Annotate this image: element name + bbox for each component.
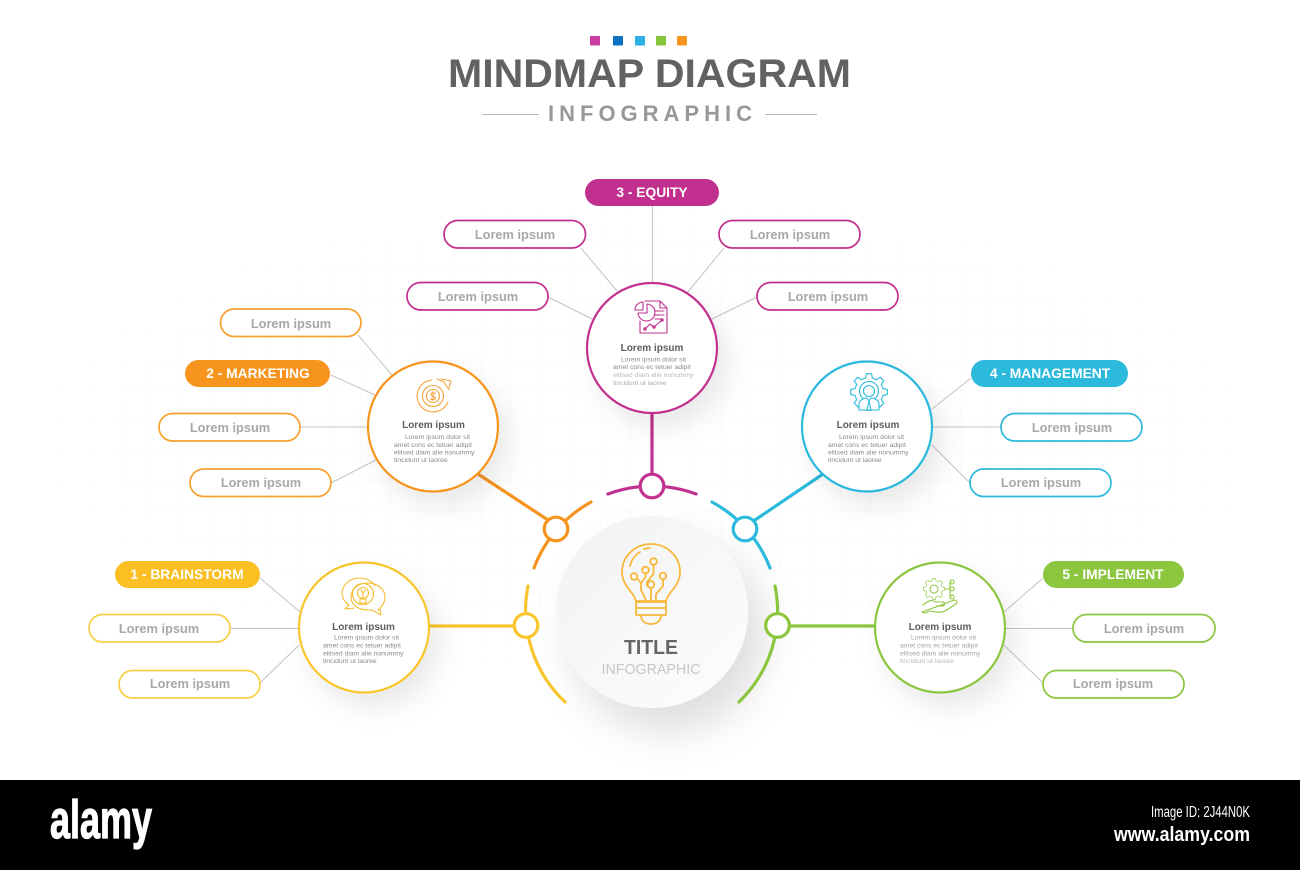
branch 4: management	[932, 360, 1142, 496]
center subtitle: INFOGRAPHIC	[602, 661, 701, 678]
text: implement node: tincidunt ut laoree	[900, 658, 954, 665]
pill: equity lower right	[757, 282, 898, 310]
text: implement node: amet cons ec tetuer adipit	[900, 642, 978, 650]
icon: speech bubbles with bulb	[342, 578, 385, 615]
branch 3: equity	[407, 179, 898, 319]
label: 1 - brainstorm: 1 - BRAINSTORM	[130, 567, 244, 582]
text: equity node: elitsed diam alie nonummy	[613, 372, 694, 379]
connector: green	[739, 586, 874, 702]
label: 4 - management: 4 - MANAGEMENT	[990, 366, 1111, 381]
label: 1 - brainstorm	[115, 561, 260, 588]
text: marketing node: tincidunt ut laoree	[394, 457, 448, 464]
text: marketing node: amet cons ec tetuer adipit	[394, 442, 472, 449]
label: 4 - management	[971, 360, 1128, 387]
pill: implement middle	[1073, 614, 1215, 642]
icon: dollar target	[417, 379, 451, 412]
text: equity node: tincidunt ut laoree	[613, 380, 667, 387]
title: MINDMAP DIAGRAM	[448, 52, 851, 96]
pill: marketing middle: Lorem ipsum	[190, 420, 270, 435]
center title: TITLE	[624, 637, 678, 659]
label: 3 - equity: 3 - EQUITY	[616, 185, 688, 200]
text: implement node: elitsed diam alie nonummy	[900, 650, 981, 658]
label: 5 - implement	[1043, 561, 1184, 588]
text: management node: tincidunt ut laoree	[828, 457, 882, 464]
logo: alamy: alamy	[50, 790, 152, 850]
text: management node	[828, 420, 909, 464]
pill: equity top left	[444, 220, 586, 248]
text: implement node: Lorem ipsum	[909, 622, 971, 633]
pill: marketing middle	[159, 414, 300, 441]
text: management node: amet cons ec tetuer adipit	[828, 442, 906, 449]
text: management node: Lorem ipsum dolor sit	[839, 434, 904, 441]
branch 1: brainstorm	[89, 561, 300, 698]
pill: equity lower left: Lorem ipsum	[438, 289, 518, 304]
icon: hand with gear	[922, 578, 957, 613]
pill: marketing top	[220, 309, 361, 336]
node: marketing	[368, 362, 498, 492]
connector: yellow	[429, 586, 565, 702]
pill: equity top right: Lorem ipsum	[750, 227, 830, 242]
text: marketing node: Lorem ipsum dolor sit	[405, 434, 470, 441]
image id: Image ID: 2J44N0K	[1151, 804, 1250, 821]
pill: marketing top: Lorem ipsum	[251, 316, 331, 331]
text: marketing node: Lorem ipsum	[402, 420, 465, 431]
text: implement node	[900, 622, 981, 665]
footer band	[0, 780, 1300, 870]
label: 2 - marketing	[185, 360, 330, 387]
text: equity node: amet cons ec tetuer adipit	[613, 364, 691, 371]
icon: report document	[635, 301, 667, 333]
text: implement node: Lorem ipsum dolor sit	[911, 634, 976, 642]
connector arcs and nodes	[429, 414, 874, 702]
branch 5: implement	[1004, 561, 1215, 698]
pill: equity lower left	[407, 282, 548, 310]
text: brainstorm node: Lorem ipsum dolor sit	[334, 634, 399, 642]
pill: brainstorm bottom	[119, 670, 260, 698]
node: equity	[587, 283, 717, 413]
label: 3 - equity	[585, 179, 719, 206]
pill: brainstorm middle	[89, 614, 230, 642]
text: brainstorm node: Lorem ipsum	[332, 622, 395, 633]
text: marketing node: elitsed diam alie nonummy	[394, 450, 475, 456]
label: 2 - marketing: 2 - MARKETING	[206, 366, 310, 381]
pill: equity top left: Lorem ipsum	[475, 227, 555, 242]
pill: management bottom: Lorem ipsum	[1001, 475, 1081, 490]
connector: orange	[478, 474, 591, 568]
text: marketing node	[394, 420, 475, 464]
connector: magenta	[608, 414, 696, 498]
icon: light bulb	[622, 544, 680, 624]
text: equity node: Lorem ipsum dolor sit	[621, 356, 686, 364]
text: equity node: Lorem ipsum	[621, 343, 683, 354]
text: brainstorm node: tincidunt ut laoree	[323, 658, 377, 665]
pill: brainstorm middle: Lorem ipsum	[119, 621, 199, 636]
text: brainstorm node	[323, 622, 404, 665]
text: brainstorm node: elitsed diam alie nonummy	[323, 650, 404, 658]
node: brainstorm	[299, 562, 429, 692]
color squares	[590, 36, 687, 46]
pill: implement middle: Lorem ipsum	[1104, 621, 1184, 636]
pill: management middle	[1001, 414, 1142, 441]
center circle	[556, 516, 748, 708]
text: brainstorm node: amet cons ec tetuer adipit	[323, 642, 401, 650]
branch 2: marketing	[159, 309, 392, 496]
pill: implement bottom	[1043, 670, 1184, 698]
label: 5 - implement: 5 - IMPLEMENT	[1062, 567, 1164, 582]
pill: marketing bottom	[190, 469, 331, 496]
pill: management middle: Lorem ipsum	[1032, 420, 1112, 435]
pill: equity lower right: Lorem ipsum	[788, 289, 868, 304]
text: equity node	[613, 343, 694, 387]
pill: equity top right	[719, 220, 860, 248]
text: management node: elitsed diam alie nonummy	[828, 450, 909, 456]
pill: implement bottom: Lorem ipsum	[1073, 676, 1153, 691]
text: management node: Lorem ipsum	[837, 420, 899, 431]
pill: management bottom	[970, 469, 1111, 496]
website: www.alamy.com	[1113, 824, 1250, 846]
connector: blue	[712, 474, 823, 568]
pill: marketing bottom: Lorem ipsum	[221, 475, 301, 490]
node: implement	[875, 562, 1005, 692]
pill: brainstorm bottom: Lorem ipsum	[150, 676, 230, 691]
node: management	[802, 362, 932, 492]
subtitle: INFOGRAPHIC	[548, 101, 752, 126]
icon: gear with person	[851, 374, 887, 410]
